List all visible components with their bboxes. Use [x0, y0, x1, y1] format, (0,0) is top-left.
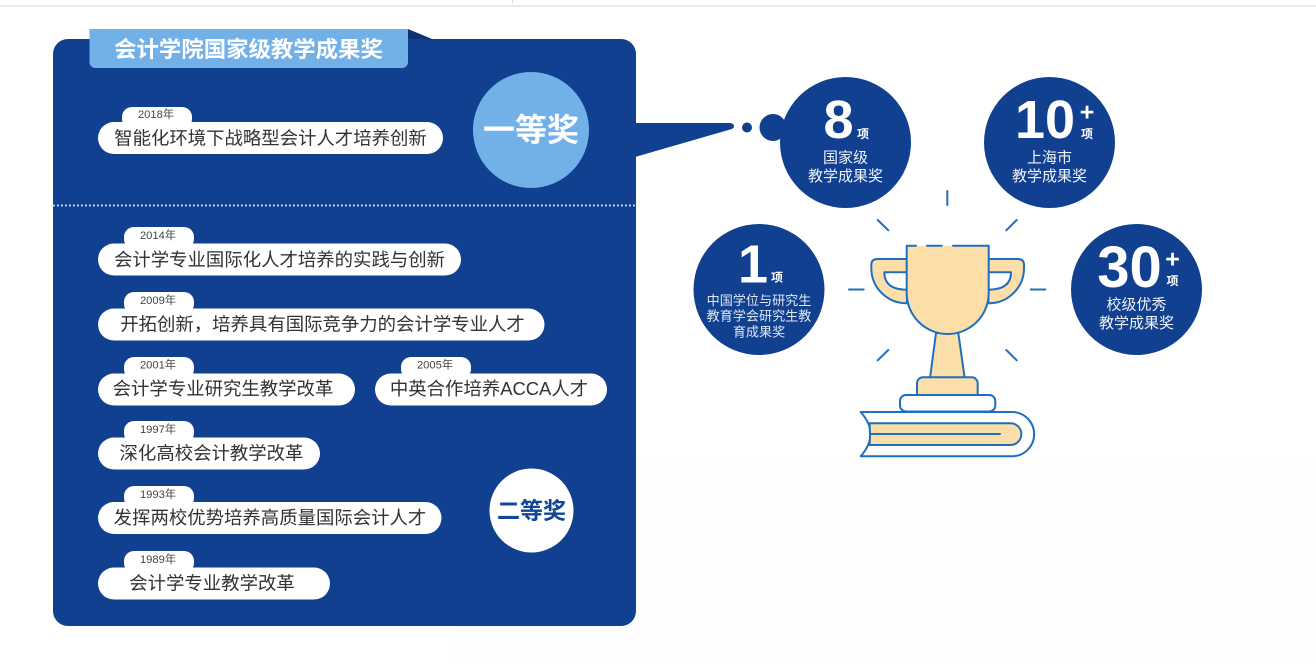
stat circle: graduate education society 1: 教育学会研究生教 [707, 308, 811, 324]
panel: awards list [53, 29, 636, 626]
stat circle: university 30+ [1071, 224, 1202, 355]
stat circle: national 8: 教学成果奖 [808, 168, 883, 185]
award item 1997: 深化高校会计教学改革 [120, 442, 303, 464]
stat circle: university 30+: 校级优秀 [1106, 296, 1167, 314]
second prize badge: 二等奖 [497, 498, 566, 524]
heading tab [90, 29, 432, 68]
award item 2018: 智能化环境下战略型会计人才培养创新 [114, 128, 427, 148]
stat circle: Shanghai 10+: 10 [1015, 90, 1075, 150]
stat circle: graduate education society 1: 中国学位与研究生 [707, 293, 811, 308]
stat circle: Shanghai 10+: 上海市 [1027, 150, 1072, 166]
stat circle: Shanghai 10+: 教学成果奖 [1012, 168, 1087, 185]
award item 2005: 2005年 [417, 358, 453, 372]
award item 2018: 2018年 [138, 107, 174, 121]
stat circle: graduate education society 1 [694, 224, 824, 355]
second prize badge [490, 468, 574, 552]
cup bowl [907, 246, 989, 334]
stat circle: university 30+: 教学成果奖 [1099, 315, 1174, 332]
stat circle: Shanghai 10+: 项 [1081, 127, 1093, 141]
award item 1997 [98, 421, 320, 470]
stat circle: national 8 [780, 77, 911, 208]
heading tab: 会计学院国家级教学成果奖 [114, 36, 383, 62]
stem [930, 333, 965, 378]
icon: trophy on book [849, 191, 1045, 456]
award item 1989: 1989年 [140, 552, 176, 566]
award item 1993: 发挥两校优势培养高质量国际会计人才 [114, 507, 426, 528]
award item 2014 [98, 227, 461, 276]
award item 2001 [98, 357, 355, 406]
left and right handles [871, 259, 1024, 303]
award item 2009: 2009年 [140, 293, 176, 307]
award item 2014: 会计学专业国际化人才培养的实践与创新 [114, 249, 445, 270]
first prize badge [473, 72, 589, 188]
award item 1997: 1997年 [140, 422, 176, 436]
callout pointer from first prize to national count [635, 114, 786, 157]
award item 2005: 中英合作培养ACCA人才 [390, 378, 588, 399]
award item 2009: 开拓创新，培养具有国际竞争力的会计学专业人才 [120, 314, 525, 334]
stat circle: national 8: 项 [857, 127, 869, 141]
award item 2014: 2014年 [140, 228, 176, 242]
award item 2001: 会计学专业研究生教学改革 [113, 378, 333, 399]
award item 1993 [98, 486, 442, 534]
award item 1989: 会计学专业教学改革 [129, 572, 295, 594]
base blocks [917, 377, 978, 395]
stat circle: graduate education society 1: 1 [738, 234, 768, 294]
divider between first and second prize [53, 204, 636, 206]
award item 2005 [375, 357, 607, 406]
award item 1993: 1993年 [140, 487, 176, 501]
stat circle: university 30+: + [1165, 246, 1180, 274]
stat circle: national 8: 8 [823, 90, 854, 150]
book [861, 412, 1034, 456]
stat circle: Shanghai 10+: + [1080, 98, 1094, 126]
stat circle: national 8: 国家级 [823, 150, 868, 166]
stat circle: university 30+: 项 [1166, 274, 1179, 288]
stat circle: Shanghai 10+ [984, 77, 1115, 208]
first prize badge: 一等奖 [483, 112, 579, 148]
stat circle: graduate education society 1: 育成果奖 [733, 324, 785, 340]
stat circle: graduate education society 1: 项 [771, 270, 783, 284]
award item 1989 [98, 551, 330, 600]
award item 2018 [98, 107, 443, 154]
award item 2009 [98, 292, 544, 340]
award item 2001: 2001年 [140, 358, 176, 372]
stat circle: university 30+: 30 [1097, 235, 1162, 300]
rays around trophy [849, 191, 1045, 360]
